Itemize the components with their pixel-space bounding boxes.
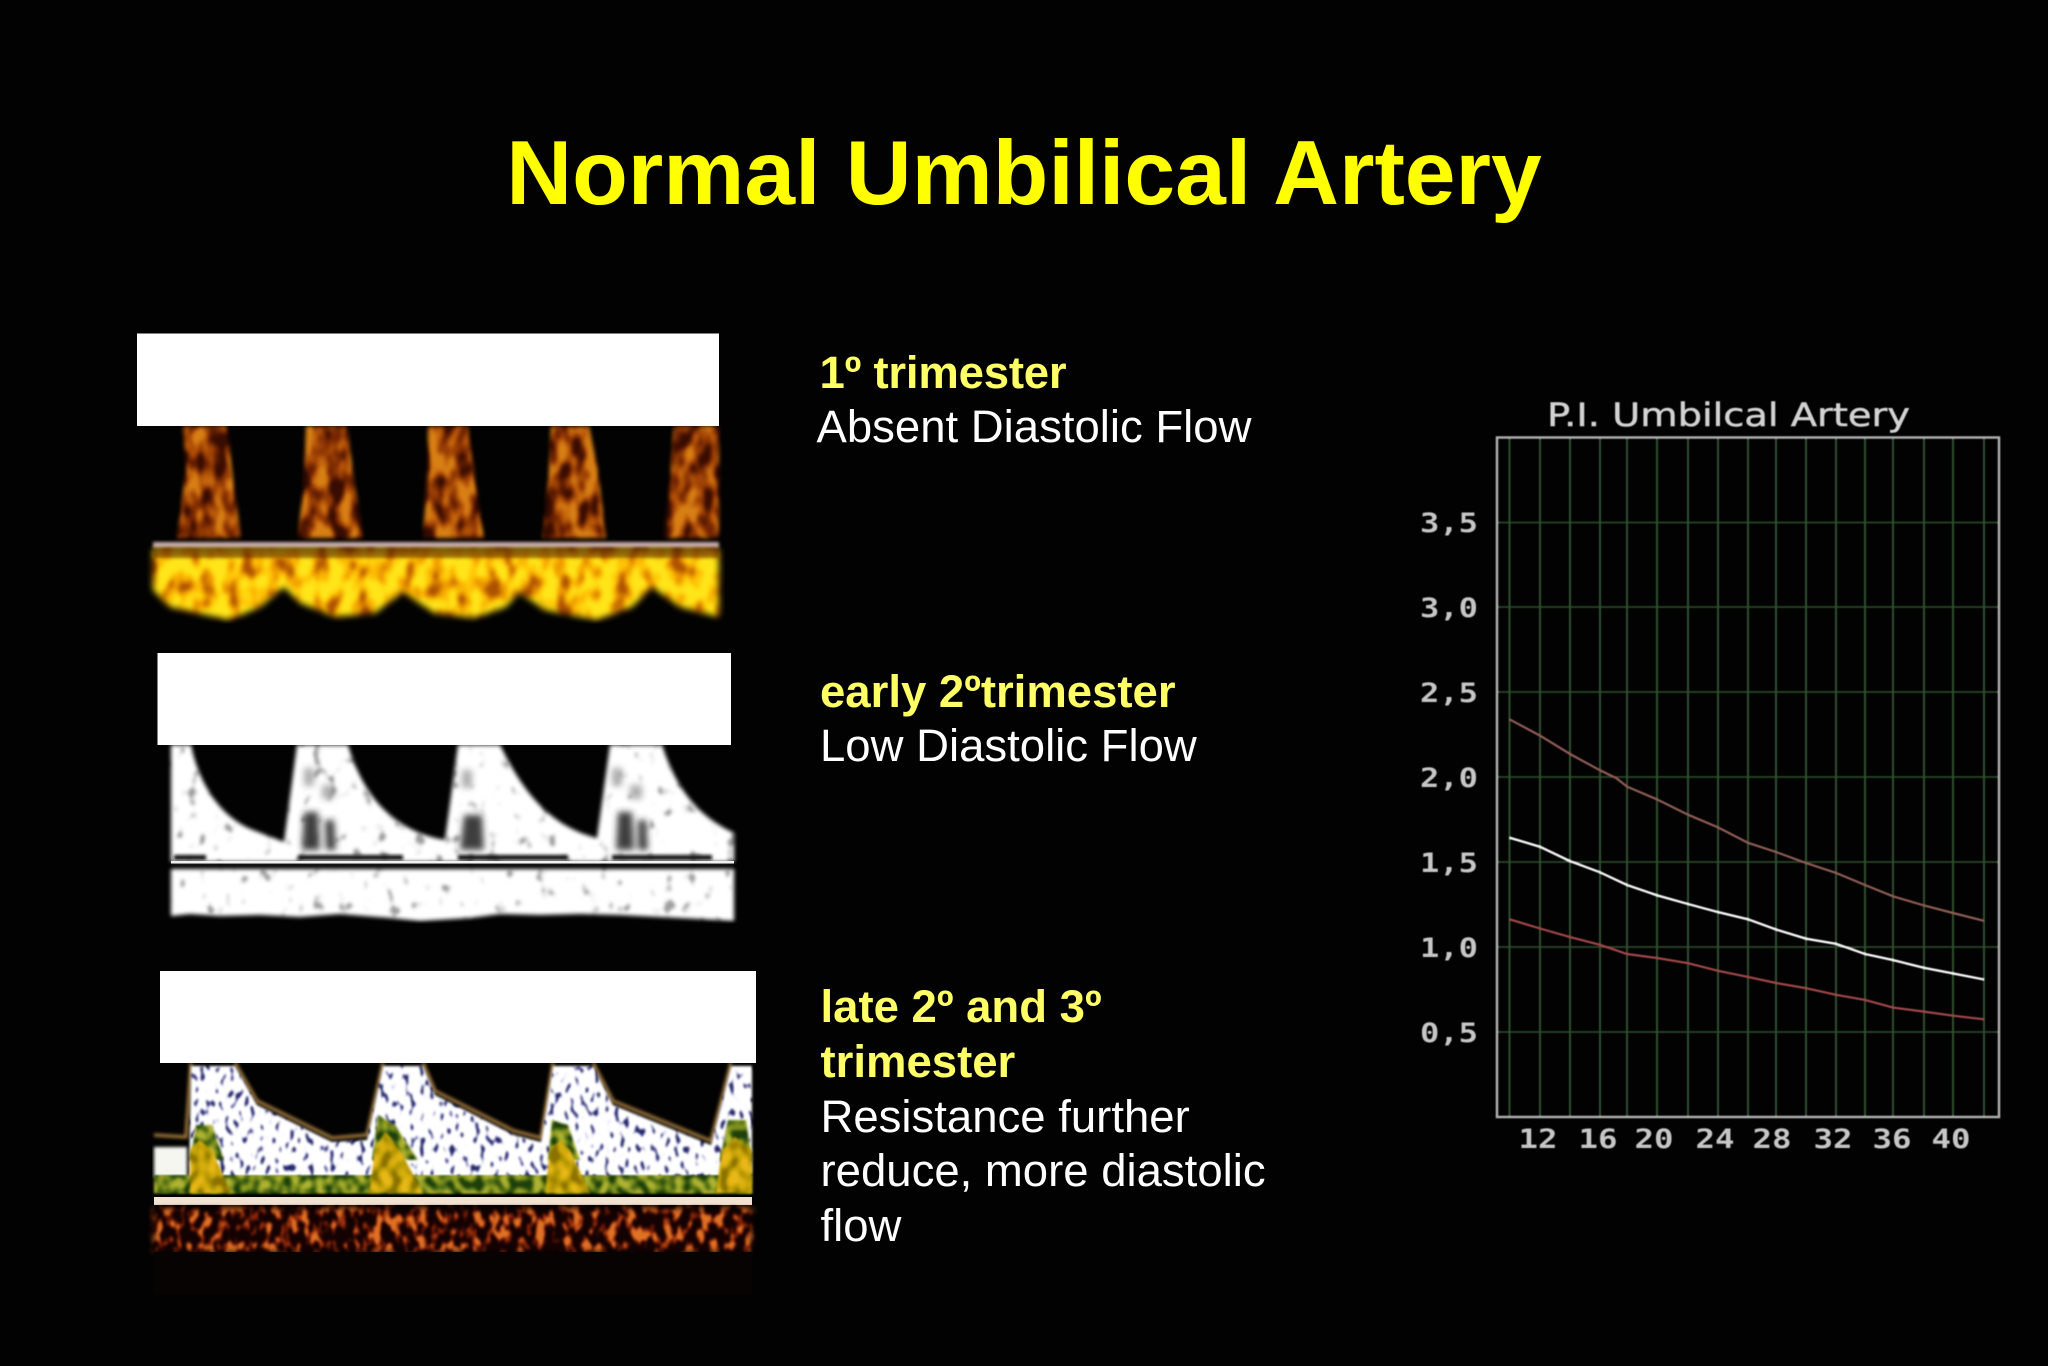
diastolic lower spectrum [154,1208,752,1252]
text block: late second and third trimester: flow [820,1200,901,1251]
x axis labels [1518,1124,1970,1155]
spectral baseline [153,542,719,548]
y axis labels: 0,5 [1420,1018,1478,1049]
white and blue spectral body [189,1066,752,1177]
text block: late second and third trimester: trimester [820,1036,1015,1087]
y axis labels: 3,0 [1420,593,1478,624]
text block: late second and third trimester [820,981,1266,1251]
text block: early second trimester [820,666,1197,771]
x axis labels: 20 [1634,1124,1674,1155]
doppler waveform: early second trimester [171,745,734,921]
white mask: first trimester [137,334,719,426]
white low-velocity band [154,1147,187,1177]
dark inner spectral windows [302,812,648,850]
x axis labels: 40 [1932,1124,1970,1155]
doppler waveform: first trimester [153,426,719,620]
dark band above baseline [171,855,734,868]
x axis labels: 12 [1518,1124,1558,1155]
white mask: early second trimester [158,653,731,745]
chart frame [1497,438,1999,1117]
text block: late second and third trimester: late 2º and 3º [820,981,1102,1032]
mean line [1510,838,1984,980]
horizontal grid [1497,522,1998,1032]
white mask: late second and third trimester [160,971,756,1063]
text block: first trimester: 1º trimester [820,346,1066,398]
text block: first trimester: Absent Diastolic Flow [816,401,1251,452]
x axis labels: 28 [1752,1124,1792,1155]
text block: late second and third trimester: reduce, more diastolic [820,1145,1266,1196]
text block: first trimester [816,346,1252,452]
grey speckle in systolic peaks [304,768,642,799]
vertical grid [1510,438,1984,1117]
title: Normal Umbilical Artery [506,122,1542,224]
dark band under baseline [153,549,719,558]
green low-velocity band [154,1175,752,1194]
spectral baseline [171,861,734,864]
doppler waveform: late second and third trimester [154,1063,752,1295]
text block: early second trimester: Low Diastolic Flow [820,720,1197,771]
text block: early second trimester: early 2ºtrimester [820,666,1176,716]
y axis labels: 2,5 [1420,678,1478,709]
y axis labels: 1,5 [1420,848,1478,879]
tan envelope outline [154,1063,731,1141]
chart title: P.I. Umbilcal Artery [1547,396,1910,434]
y axis labels: 3,5 [1420,508,1478,539]
y axis labels [1420,508,1478,1049]
diastolic lower spectrum [153,549,719,620]
text block: late second and third trimester: Resistance further [820,1091,1190,1142]
x axis labels: 36 [1872,1124,1912,1155]
lower percentile line [1510,919,1984,1019]
x axis labels: 32 [1814,1124,1852,1155]
spectral baseline [154,1197,752,1205]
y axis labels: 2,0 [1420,763,1478,794]
diastolic lower spectrum [171,869,734,921]
faint lower band [154,1252,752,1295]
yellow and green systolic wedges [190,1115,752,1193]
line chart: P.I. Umbilical Artery [1420,396,1999,1155]
x axis labels: 16 [1578,1124,1618,1155]
upper percentile line [1510,719,1984,921]
systolic flow bursts [177,426,719,538]
systolic and low diastolic envelope [171,745,734,862]
y axis labels: 1,0 [1420,933,1478,964]
x axis labels: 24 [1696,1124,1734,1155]
